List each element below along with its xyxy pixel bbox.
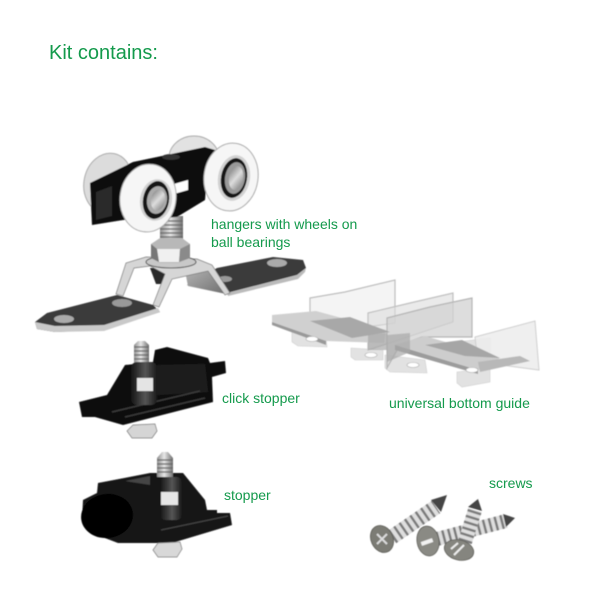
label: hangers: ball bearings [211, 234, 290, 250]
cylinder [78, 491, 136, 541]
product: screws [366, 495, 515, 564]
rear fin [310, 280, 395, 335]
label: stopper: stopper [224, 487, 271, 503]
screw 3 [442, 499, 482, 564]
rear wheels [78, 136, 219, 217]
label: screws: screws [489, 475, 533, 491]
lower blocks [292, 330, 490, 387]
bolt [157, 452, 173, 477]
front left wheel [116, 160, 180, 236]
middle fin [368, 293, 453, 350]
bolt head [153, 542, 182, 557]
black carriage body [90, 147, 215, 225]
label: universal bottom guide: universal bottom guide [389, 395, 530, 411]
left mounting plate [35, 295, 160, 332]
nut [137, 378, 153, 391]
screw heads [306, 336, 478, 372]
product: stopper [78, 452, 232, 557]
nut [161, 492, 178, 505]
right flap [475, 321, 539, 370]
right mounting plate [187, 257, 306, 296]
product: universal bottom guide [272, 280, 539, 387]
title: Kit contains: [49, 42, 158, 64]
body [82, 473, 232, 543]
washer [146, 256, 196, 268]
front fin [387, 298, 472, 368]
threaded bolt [160, 216, 183, 242]
product: click stopper [79, 341, 226, 438]
bent bracket [116, 257, 230, 307]
bolt head [127, 424, 157, 438]
sliding plates [272, 311, 530, 374]
label: click stopper: click stopper [222, 390, 300, 406]
product: hanger with wheels [35, 136, 306, 332]
hex nut [151, 238, 190, 263]
bolt [134, 341, 149, 363]
body [79, 347, 226, 425]
collar [131, 362, 157, 405]
screw 1 [366, 495, 447, 556]
screw 2 [415, 514, 515, 558]
front right wheel [200, 140, 262, 214]
label: hangers: hangers with wheels on [211, 216, 357, 232]
collar [160, 477, 182, 520]
